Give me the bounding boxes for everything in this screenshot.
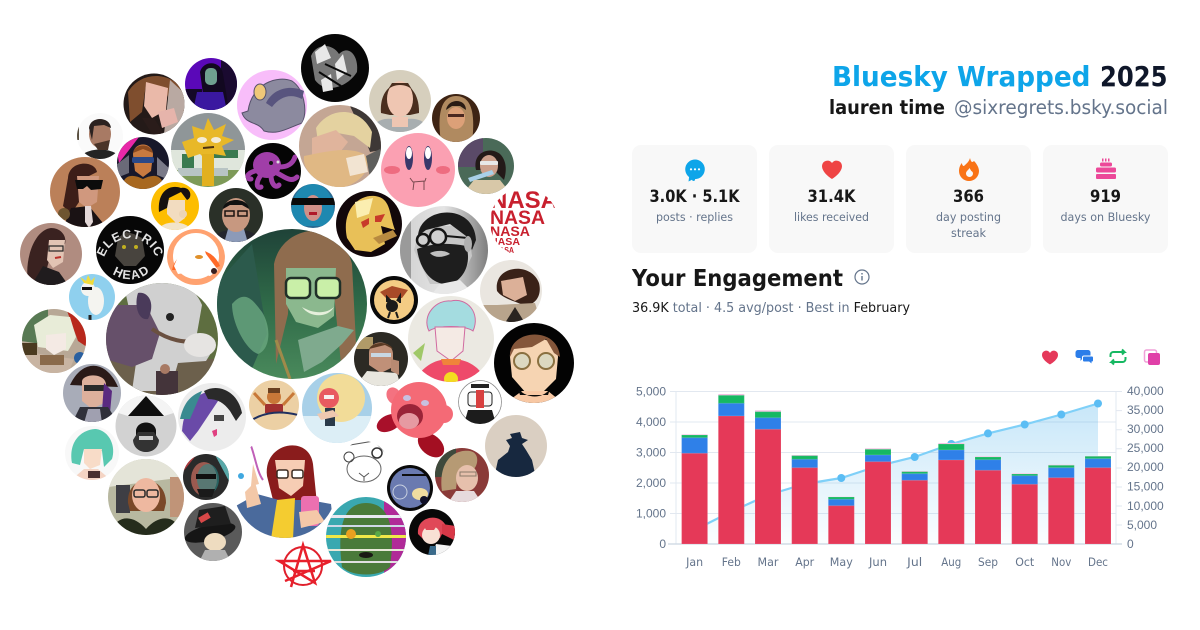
left axis labels [636,384,666,551]
month labels: Jan [685,555,703,569]
icon: heart [822,161,842,179]
avatar: NASA worm logo: NASA [490,237,520,248]
left axis labels: 3,000 [636,446,666,460]
legend: metrics [1042,350,1160,365]
icon: quotes [1144,350,1160,365]
month labels: Jul [906,555,922,569]
stat card: likes received [769,145,894,253]
bar: Jul [902,471,928,544]
month labels: Nov [1051,555,1071,569]
right axis labels [1127,384,1164,551]
heading: Your Engagement: Your Engagement [631,264,843,292]
avatar: red twin-tail anime girl [408,508,456,556]
avatar: NASA worm logo [490,191,555,253]
avatar: Kirby face [380,132,456,208]
avatar: drawn man with glasses on black [493,322,575,404]
avatar: Electric Head logo: ELECTRIC [96,230,162,256]
stat card: posting streak: streak [951,226,986,240]
avatar: black cat on yellow with red leaves [369,275,419,325]
avatar: yellow-haired anime on black [335,190,403,258]
icon: birthday cake [1096,158,1116,179]
avatar: man under a black triangle [115,395,177,457]
stat card: posting streak: 366 [953,187,984,206]
avatar: cockatoo on light blue [68,273,116,321]
avatar: silhouette on parchment [484,414,548,478]
stat card: posts and replies: posts · replies [656,210,733,224]
engagement summary line: 36.9K total · 4.5 avg/post · Best in February [632,300,910,316]
bar: Sep [975,456,1001,544]
avatar: white fox on orange [166,228,226,288]
avatar: anime girl with pale green hair [21,308,87,374]
avatar: sunglasses man on neon [116,136,170,190]
avatar: illustrated woman with long dark hair [19,222,83,286]
icon: reposts [1110,350,1126,364]
month labels: Dec [1088,555,1108,569]
header: display name and handle: @sixregrets.bsky.social [954,96,1168,119]
left axis labels: 0 [659,537,666,551]
avatar: bearded man in black and white [399,205,489,295]
avatar: NASA worm logo: NASA [490,187,558,214]
month labels [685,555,1108,569]
avatar: cow statue [105,281,219,399]
stat card: days on Bluesky: days on Bluesky [1060,210,1151,224]
bar: Nov [1048,465,1074,544]
avatar: blonde woman with cat [298,104,382,188]
avatar: woman in sunglasses on tan background [49,156,121,228]
right axis labels: 10,000 [1127,499,1164,513]
stat card: posts and replies: 3.0K · 5.1K [650,187,741,206]
avatar: Electric Head logo [96,216,164,284]
avatar: NASA worm logo: NASA [490,223,530,239]
avatar: press hat cartoon [183,502,243,562]
right axis labels: 30,000 [1127,422,1164,436]
left axis labels: 5,000 [636,384,666,398]
bar: Aug [938,443,964,544]
avatar: blue-haired person with censor bar [290,183,336,229]
right axis labels: 5,000 [1127,518,1157,532]
right axis labels: 35,000 [1127,403,1164,417]
avatar: red-haired woman selfie illustration [236,445,332,538]
avatar: NASA worm logo: NASA [494,246,514,255]
avatar: large anime character with glowing glasses [216,228,368,380]
right axis labels: 40,000 [1127,384,1164,398]
avatar: man with dark hair [77,119,116,159]
left axis labels: 2,000 [636,476,666,490]
right axis labels: 0 [1127,537,1134,551]
avatar: pink Kirby character [374,382,453,462]
right axis labels: 20,000 [1127,460,1164,474]
left axis labels: 4,000 [636,415,666,429]
avatar: anaglyph glitch portrait [182,453,230,501]
avatar: grey blob on pink [236,69,308,141]
avatar: tiny hatted figure [457,379,503,425]
left axis labels: 1,000 [636,506,666,520]
month labels: Jun [868,555,887,569]
avatar: NASA worm logo: NASA [490,208,545,229]
avatar: black and white ink drawing [300,33,370,103]
cumulative area and line [695,400,1102,544]
month labels: May [830,555,853,569]
bar: Jan [682,434,708,544]
avatar: Animal Crossing character on moon [301,372,373,446]
avatar: man leaning on hand with glasses [353,331,409,387]
avatar: purple and teal hair sketch [177,382,247,452]
stat card: days on Bluesky [1043,145,1168,253]
avatar: woman with glasses, dark top [107,458,185,536]
stat card: likes received: 31.4K [808,187,857,206]
stat card: posts and replies [632,145,757,253]
avatar: sun mascot on football field [170,112,246,188]
right axis labels: 25,000 [1127,441,1164,455]
header: Bluesky Wrapped 2025: 2025 [1100,60,1168,93]
month labels: Feb [722,555,741,569]
avatar: woman with short brown hair [368,69,432,133]
month labels: Apr [795,555,814,569]
bar: May [828,497,854,544]
avatar: retro cartoon boy with raised arms [248,379,300,431]
icon: info [855,270,869,284]
bar: Apr [792,455,818,544]
month labels: Mar [758,555,779,569]
bar: Mar [755,410,781,544]
icon: flame [959,158,979,181]
header: Bluesky Wrapped 2025: Bluesky Wrapped [832,60,1090,93]
avatar: teal haired anime girl [71,429,114,480]
icon: replies [1076,350,1094,364]
stat card: posting streak: day posting [936,210,1001,224]
avatar: smiling person with glasses [434,447,490,503]
bar: Feb [718,394,744,544]
stat card: posting streak [906,145,1031,253]
avatar: dark haired character on yellow [150,181,200,231]
avatar: glitched face with colour stripes [325,496,408,578]
chart: monthly engagement with cumulative line [636,384,1164,569]
avatar: woman with long blonde hair [431,93,481,143]
header: display name and handle: lauren time [829,96,945,119]
avatar: purple octopus [244,142,302,200]
avatar: person singing into microphone [457,137,515,195]
avatar: pencil sketch of bear [339,440,389,490]
bar: Jun [865,448,891,544]
avatar: red anarchy scribble [279,545,331,587]
month labels: Oct [1015,555,1035,569]
avatar cluster [20,34,574,588]
avatar: purple neon portrait [184,57,239,111]
icon: chat bubble [685,160,705,182]
avatar: woman with brown hair and glasses [123,73,185,135]
avatar: woman with dark bob [479,259,543,323]
bar: Dec [1085,456,1111,544]
month labels: Sep [978,555,998,569]
bar: Oct [1012,473,1038,544]
avatar: blue moon scene [386,464,434,512]
stat card: likes received: likes received [794,210,869,224]
avatar: Electric Head logo: HEAD [113,266,148,280]
month labels: Aug [941,555,961,569]
header: display name and handle [829,96,1168,119]
avatar: woman in witch hat [62,363,122,423]
stat card: days on Bluesky: 919 [1090,187,1121,206]
icon: likes [1042,351,1058,364]
avatar: curly-haired pencil drawing [407,295,495,386]
avatar: man with glasses in suit [208,187,264,243]
right axis labels: 15,000 [1127,480,1164,494]
